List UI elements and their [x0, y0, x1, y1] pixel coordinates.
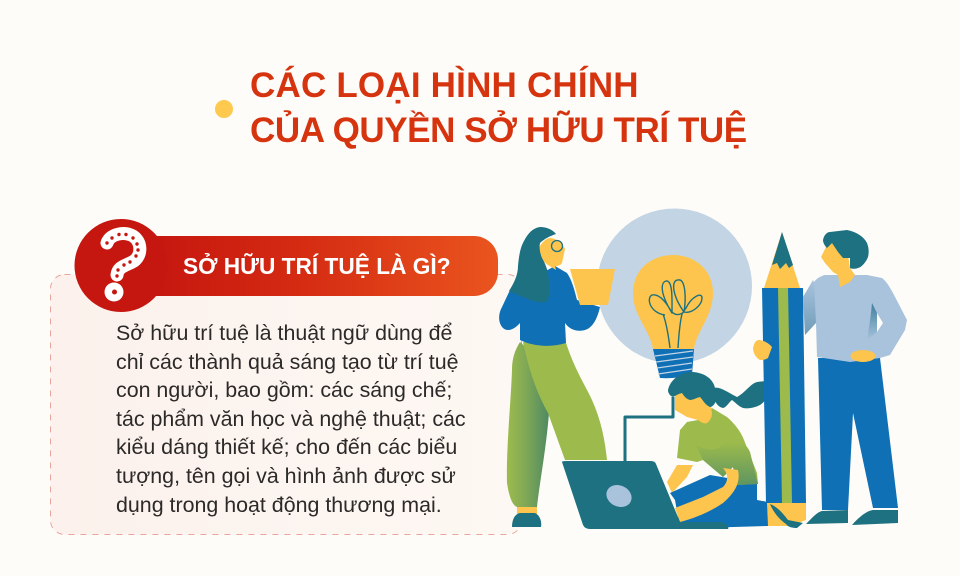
title	[250, 66, 747, 150]
title: CÁC LOẠI HÌNH CHÍNH	[250, 66, 639, 105]
heading banner	[130, 236, 498, 296]
definition text: con người, bao gồm: các sáng chế;	[116, 378, 452, 402]
definition text: dụng trong hoạt động thương mại.	[116, 493, 442, 517]
illustration	[499, 208, 907, 529]
title: CỦA QUYỀN SỞ HỮU TRÍ TUỆ	[250, 111, 747, 150]
figure: standing man	[803, 230, 907, 525]
title bullet dot	[215, 100, 233, 118]
icon: laptop	[562, 461, 728, 529]
definition text: tác phẩm văn học và nghệ thuật; các	[116, 407, 466, 431]
figure: standing woman	[499, 227, 615, 527]
definition text: chỉ các thành quả sáng tạo từ trí tuệ	[116, 350, 459, 374]
figure: pencil	[753, 232, 806, 528]
figure: seated girl	[625, 372, 775, 528]
icon: light bulb with halo	[597, 208, 752, 378]
definition text: kiểu dáng thiết kế; cho đến các biểu	[116, 435, 457, 459]
heading banner: SỞ HỮU TRÍ TUỆ LÀ GÌ?	[183, 253, 451, 279]
definition text: tượng, tên gọi và hình ảnh được sử	[116, 464, 456, 488]
panel: definition	[50, 274, 522, 535]
definition text: Sở hữu trí tuệ là thuật ngữ dùng để	[116, 321, 452, 345]
icon: question mark	[74, 219, 157, 312]
definition text	[116, 321, 466, 517]
